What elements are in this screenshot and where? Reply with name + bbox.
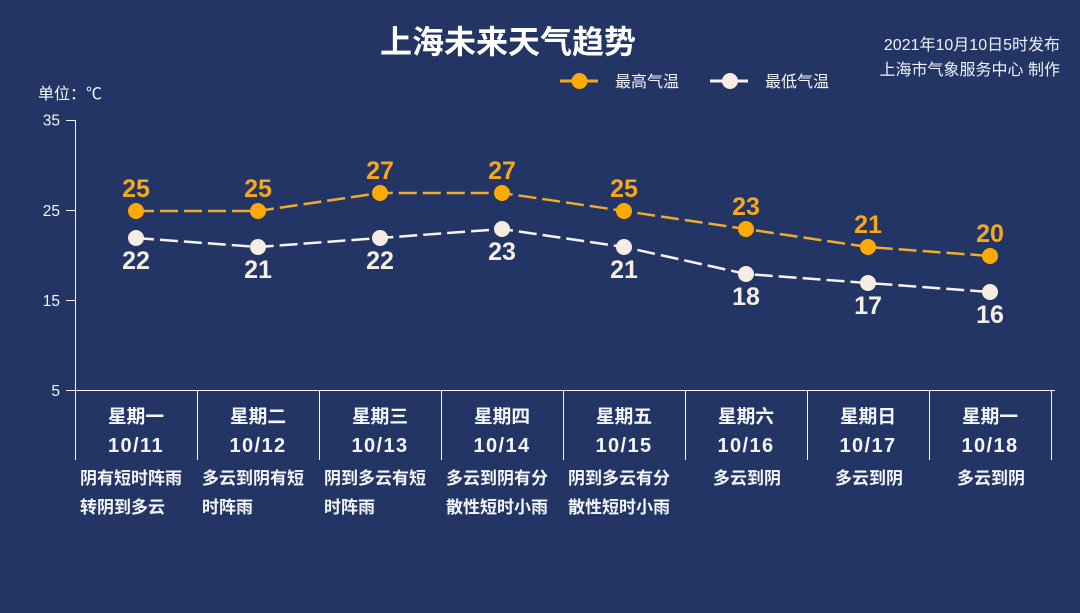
low temperature line: 23: [488, 238, 516, 266]
weather descriptions: [80, 468, 1025, 517]
high temperature line: 25: [122, 175, 150, 203]
publish info: [880, 36, 1060, 79]
title: 上海未来天气趋势: [380, 17, 636, 63]
y axis: 15: [43, 293, 60, 310]
y axis: 35: [43, 112, 60, 130]
weather descriptions: 多云到阴: [957, 468, 1025, 488]
weather descriptions: 多云到阴: [835, 468, 903, 488]
legend: low temperature: 最低气温: [765, 73, 829, 91]
weekday and date labels: 星期四: [474, 406, 530, 427]
high temperature line: [122, 157, 1004, 264]
low temperature line: 22: [122, 247, 150, 275]
publish info: 上海市气象服务中心 制作: [880, 61, 1060, 79]
weekday and date labels: 10/11: [108, 435, 164, 457]
weekday and date labels: 10/12: [229, 435, 287, 457]
weather descriptions: 多云到阴有分: [446, 468, 548, 488]
weekday and date labels: 10/17: [839, 435, 897, 457]
publish info: 2021年10月10日5时发布: [884, 36, 1060, 54]
legend: high temperature: [560, 73, 679, 91]
weather descriptions: 时阵雨: [202, 498, 253, 517]
weekday and date labels: 10/15: [595, 435, 653, 457]
low temperature line: 21: [610, 256, 638, 284]
low temperature line: 22: [366, 247, 394, 275]
high temperature line: 25: [244, 175, 272, 203]
y axis: [43, 112, 76, 400]
low temperature line: 21: [244, 256, 272, 284]
weekday and date labels: 10/18: [961, 435, 1019, 457]
weekday and date labels: 星期二: [230, 406, 286, 427]
weekday and date labels: 10/14: [473, 435, 531, 457]
y axis: 5: [51, 383, 60, 400]
low temperature line: 16: [976, 301, 1004, 329]
weekday and date labels: 星期六: [718, 406, 774, 427]
high temperature line: 27: [488, 157, 516, 185]
weather descriptions: 多云到阴: [713, 468, 781, 488]
weekday and date labels: 星期五: [596, 406, 652, 427]
weekday and date labels: 星期三: [352, 406, 408, 427]
legend: low temperature: [710, 73, 829, 91]
weather descriptions: 转阴到多云: [80, 497, 165, 517]
weather descriptions: 散性短时小雨: [446, 498, 548, 517]
weather descriptions: 散性短时小雨: [568, 498, 670, 517]
high temperature line: 20: [976, 220, 1004, 248]
weather descriptions: 阴到多云有短: [324, 468, 426, 488]
weather descriptions: 阴到多云有分: [568, 468, 670, 488]
low temperature line: [122, 221, 1004, 329]
weather descriptions: 多云到阴有短: [202, 468, 304, 488]
weather descriptions: 时阵雨: [324, 498, 375, 517]
weekday and date labels: 星期一: [962, 406, 1018, 427]
weather descriptions: 阴有短时阵雨: [80, 469, 182, 488]
high temperature line: 21: [854, 211, 882, 239]
weekday and date labels: 10/13: [351, 435, 409, 457]
legend: high temperature: 最高气温: [615, 73, 679, 91]
low temperature line: 18: [732, 283, 760, 311]
weekday and date labels: [108, 406, 1019, 457]
high temperature line: 25: [610, 175, 638, 203]
high temperature line: 27: [366, 157, 394, 185]
low temperature line: 17: [854, 292, 882, 320]
x axis and category ticks: [66, 390, 1055, 460]
legend: [560, 73, 829, 91]
unit label: 单位：℃: [38, 80, 102, 104]
weekday and date labels: 星期一: [108, 406, 164, 427]
weekday and date labels: 星期日: [840, 406, 896, 427]
y axis: 25: [43, 203, 60, 220]
weekday and date labels: 10/16: [717, 435, 775, 457]
high temperature line: 23: [732, 193, 760, 221]
